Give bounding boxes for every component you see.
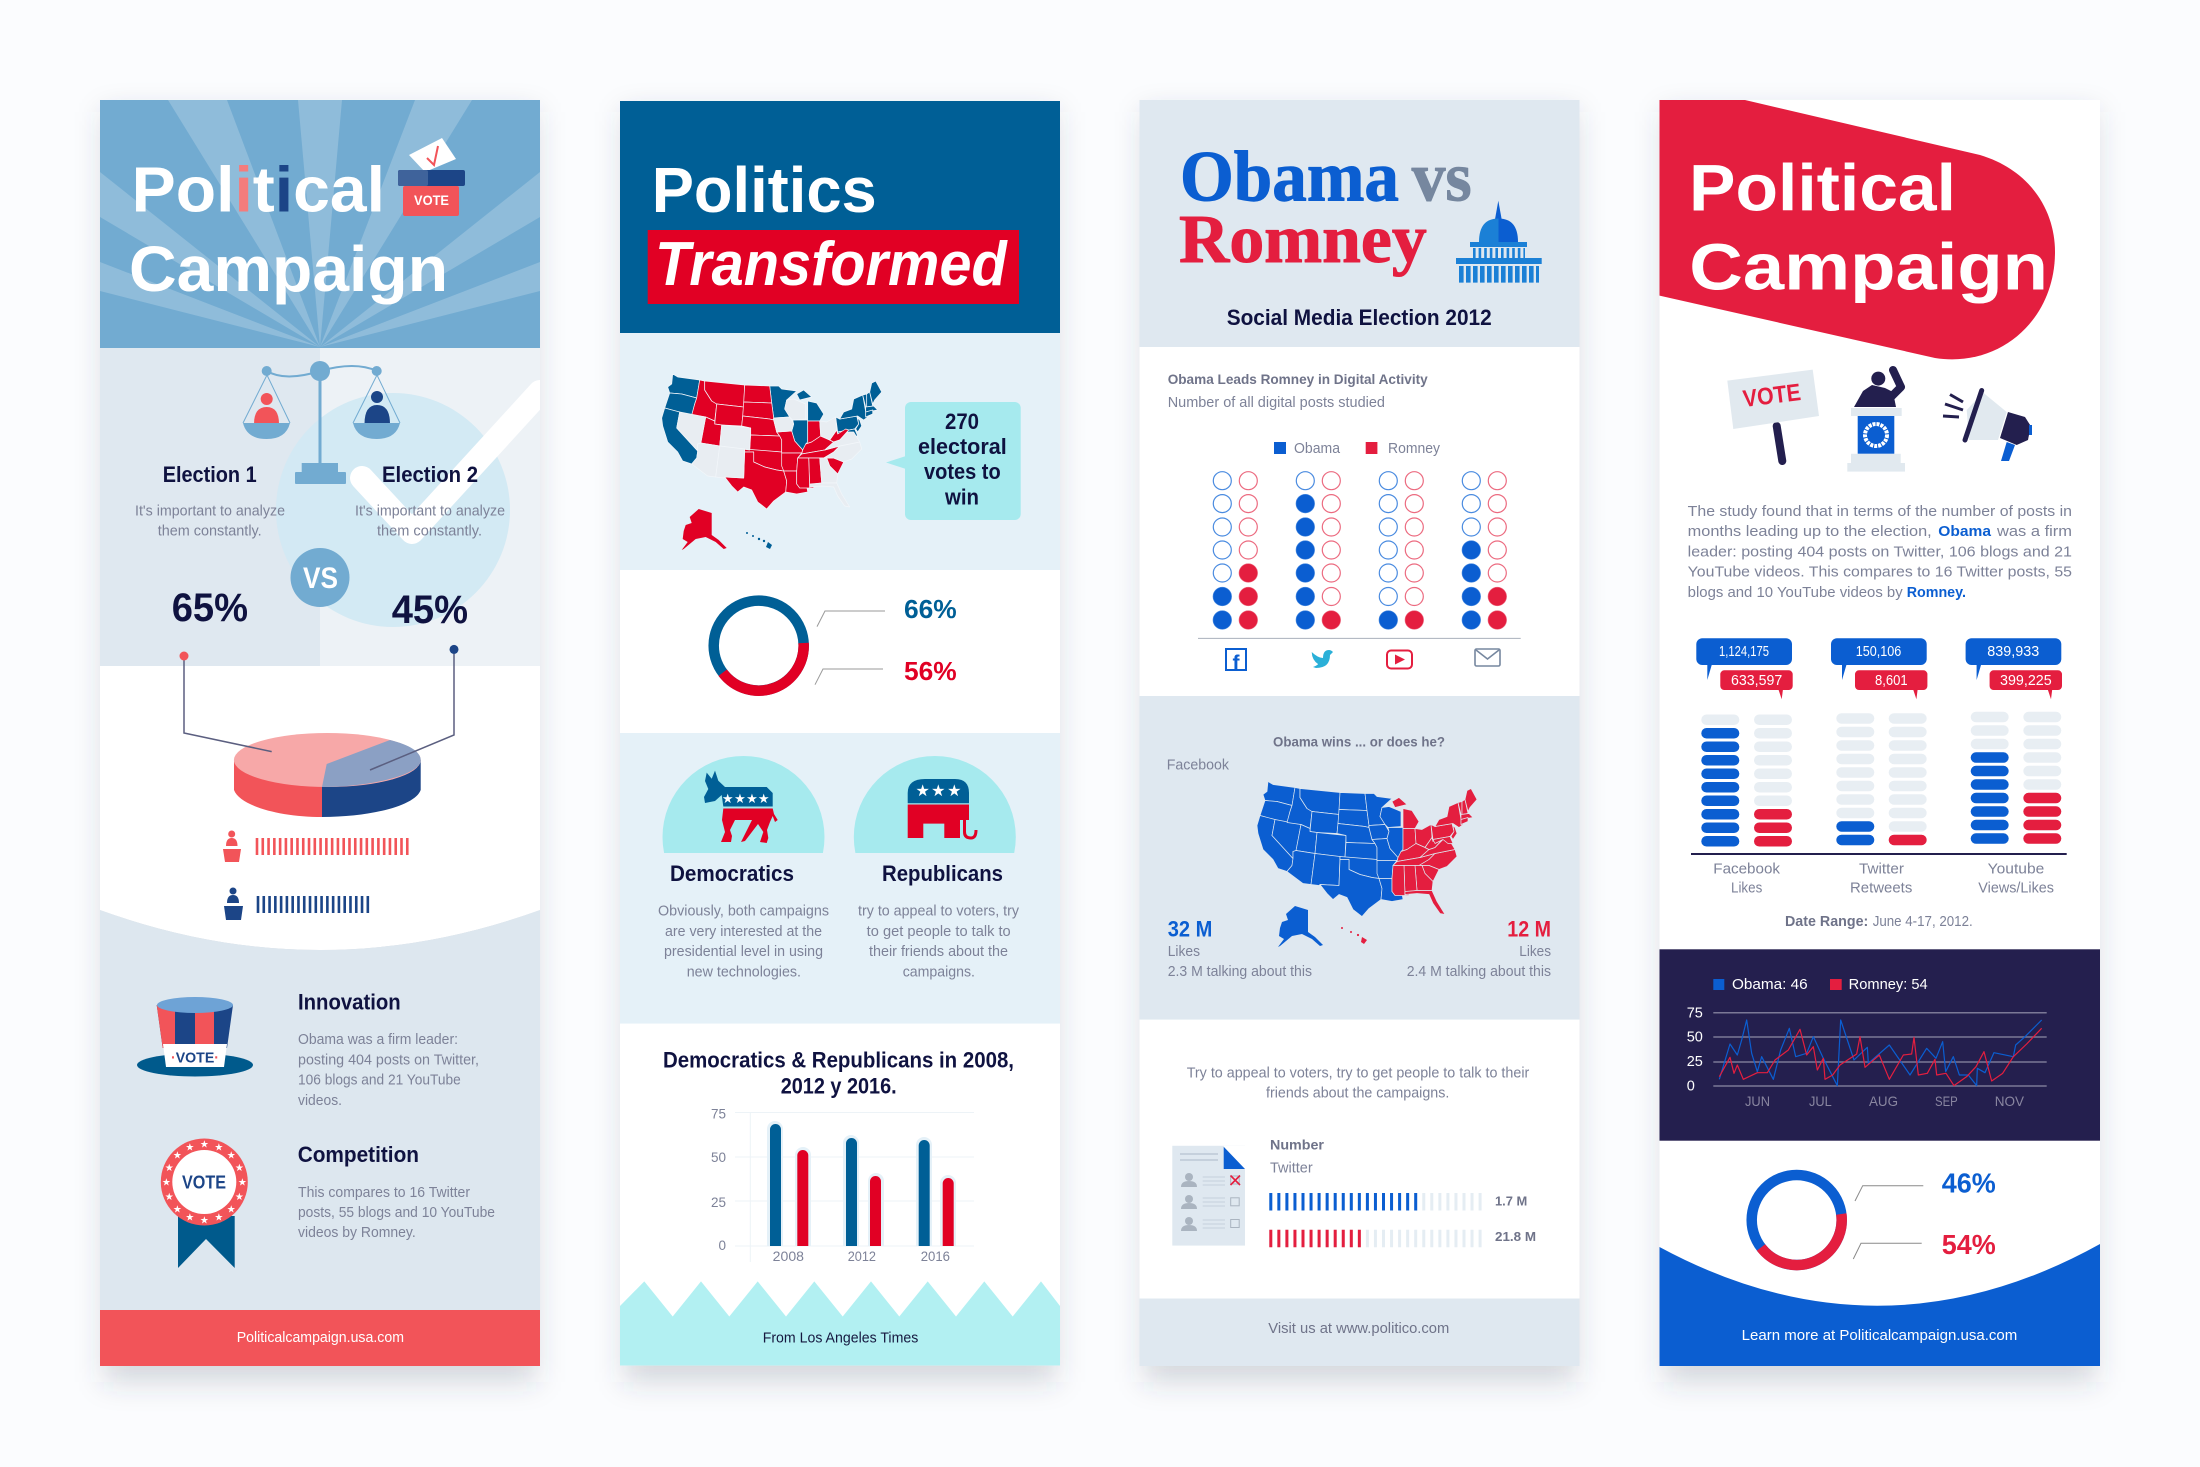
- title: [129, 153, 448, 305]
- obama likes stat: 2.3 M talking about this: [1168, 964, 1312, 980]
- callout: 270 electoral votes: 270: [945, 409, 979, 434]
- callout: 270 electoral votes: votes to: [924, 459, 1001, 484]
- party section background: [620, 733, 1060, 1024]
- twitter number bars: [1269, 1137, 1536, 1244]
- appeal text: [1187, 1065, 1529, 1102]
- icon: twitter: [1312, 650, 1333, 668]
- value 56: 56%: [904, 656, 957, 686]
- white middle section: [100, 666, 540, 950]
- icon: youtube: [1387, 650, 1412, 668]
- twitter number bars: 1.7 M: [1495, 1194, 1527, 1209]
- icon: vote rosette: VOTE: [182, 1173, 226, 1193]
- republicans text: try to appeal to voters, try: [858, 903, 1020, 919]
- chart labels: Views/Likes: [1978, 880, 2054, 897]
- digital activity heading: Obama Leads Romney in Digital Activity: [1168, 371, 1428, 387]
- bar chart: 2008: [773, 1249, 804, 1264]
- innovation text: posting 404 posts on Twitter,: [298, 1052, 479, 1068]
- election 1 text: Election 1: [163, 462, 257, 487]
- democratics text: are very interested at the: [665, 924, 822, 940]
- paragraph: blogs and 10 YouTube videos by: [1688, 585, 1903, 601]
- zigzag footer: From Los Angeles Times: [763, 1330, 918, 1347]
- republicans text: Republicans: [882, 861, 1003, 886]
- twitter number bars: Twitter: [1270, 1161, 1313, 1177]
- icon: donkey: [704, 771, 778, 843]
- callout: 270 electoral votes: [886, 402, 1021, 520]
- icon: megaphone: [1943, 390, 2032, 461]
- obama likes stat: 32 M: [1168, 916, 1212, 941]
- chart labels: Youtube: [1988, 860, 2044, 877]
- speech bubbles youtube: 399,225: [2000, 673, 2052, 689]
- twitter number bars: Number: [1270, 1137, 1325, 1153]
- icon: red podium with bars: [223, 830, 411, 862]
- bar chart: 0: [718, 1238, 726, 1253]
- panel: obama vs romney: [1140, 100, 1580, 1366]
- gridlines and axis labels: JUN: [1745, 1093, 1770, 1109]
- gridlines and axis labels: [1687, 1005, 2047, 1109]
- footer: Visit us at www.politico.com: [1268, 1321, 1449, 1337]
- icon: vote rosette: ★★★★★★★★★★★★★★★★: [162, 1140, 247, 1226]
- digital activity heading: [1168, 371, 1428, 411]
- map section background: [620, 333, 1060, 570]
- republicans text: [858, 861, 1020, 981]
- legend: Romney: [1388, 441, 1441, 457]
- democratics text: [658, 861, 829, 981]
- title: Political: [132, 153, 385, 225]
- republicans text: their friends about the: [869, 944, 1008, 960]
- innovation text: videos.: [298, 1093, 342, 1109]
- header: [620, 101, 1060, 333]
- icon: ballot box: [398, 138, 465, 216]
- gridlines and axis labels: 25: [1687, 1054, 1703, 1070]
- legend: Obama: [1294, 441, 1341, 457]
- legend: [1274, 441, 1441, 457]
- election 1 text: [135, 462, 285, 540]
- election 2 text: It's important to analyze: [355, 503, 505, 519]
- header: Transformed: [655, 230, 1008, 299]
- election 1 text: them constantly.: [158, 524, 262, 540]
- chart legend: Romney: 54: [1849, 977, 1928, 993]
- republicans text: to get people to talk to: [867, 924, 1011, 940]
- map heading: Obama wins ... or does he?: [1273, 733, 1445, 749]
- percent 65: 65%: [172, 586, 248, 630]
- digital activity heading: Number of all digital posts studied: [1168, 395, 1385, 411]
- blue footer wave: Learn more at Politicalcampaign.usa.com: [1742, 1327, 2017, 1344]
- election 2 text: [355, 462, 505, 540]
- title: [1689, 151, 2048, 304]
- panel: politics transformed: [620, 101, 1060, 1366]
- hawaii: [746, 532, 772, 549]
- lower background: [100, 910, 540, 1310]
- white base: [1660, 100, 2100, 1366]
- icon: facebook: [1226, 649, 1246, 675]
- paragraph: leader: posting 404 posts on Twitter, 106 blogs and 21: [1688, 545, 2072, 561]
- alaska: [682, 509, 727, 550]
- vs badge: VS: [303, 562, 338, 595]
- democratics text: Obviously, both campaigns: [658, 903, 829, 919]
- romney likes stat: Likes: [1519, 944, 1551, 960]
- competition text: videos by Romney.: [298, 1225, 416, 1241]
- footer: Politicalcampaign.usa.com: [237, 1330, 404, 1346]
- header background: [1140, 100, 1580, 347]
- white base: [1140, 100, 1580, 1366]
- paragraph: was a firm: [1996, 524, 2072, 540]
- democratics text: presidential level in using: [664, 944, 823, 960]
- romney likes stat: [1407, 916, 1551, 980]
- map section background: [1140, 696, 1580, 1020]
- democratics text: new technologies.: [687, 965, 801, 981]
- vs badge: [290, 548, 350, 607]
- stacked pill chart: [1691, 712, 2067, 854]
- gridlines and axis labels: JUL: [1809, 1093, 1832, 1109]
- bar chart: [711, 1107, 974, 1264]
- date range: Date Range:: [1785, 914, 1868, 930]
- paragraph: Obama: [1938, 524, 1992, 540]
- subtitle: Social Media Election 2012: [1227, 305, 1492, 330]
- gridlines and axis labels: 50: [1687, 1030, 1703, 1046]
- zigzag footer: [620, 1281, 1060, 1366]
- chart section background: [620, 1024, 1060, 1366]
- date range: June 4-17, 2012.: [1873, 914, 1973, 930]
- hawaii: [1341, 927, 1367, 944]
- percent 45: 45%: [392, 588, 468, 632]
- innovation text: Innovation: [298, 990, 401, 1015]
- bar chart: 2016: [921, 1249, 950, 1264]
- chart labels: Facebook: [1713, 860, 1781, 877]
- chart heading: [663, 1048, 1014, 1098]
- icon: vote rosette: [161, 1138, 248, 1268]
- chart legend: Obama: 46: [1732, 977, 1808, 993]
- icon: facebook: f: [1232, 652, 1240, 675]
- icon: elephant: ★★★: [916, 781, 961, 800]
- icon: ballot box: VOTE: [414, 192, 449, 208]
- panel: political campaign red: [1660, 100, 2100, 1366]
- innovation text: 106 blogs and 21 YouTube: [298, 1073, 461, 1089]
- chart legend: [1713, 977, 1928, 993]
- icon: speaker at podium: [1847, 370, 1905, 472]
- speech bubbles facebook: 633,597: [1731, 673, 1782, 689]
- value 66: 66%: [904, 594, 957, 624]
- speech bubbles youtube: [1966, 638, 2062, 699]
- competition text: posts, 55 blogs and 10 YouTube: [298, 1205, 495, 1221]
- romney likes stat: 2.4 M talking about this: [1407, 964, 1551, 980]
- election 1 text: It's important to analyze: [135, 503, 285, 519]
- donut section background: [620, 570, 1060, 733]
- competition text: [298, 1142, 495, 1241]
- chart labels: [1713, 860, 2054, 897]
- chart labels: Retweets: [1850, 880, 1912, 897]
- callout: 270 electoral votes: win: [944, 485, 979, 510]
- title: Obama: [1180, 137, 1399, 217]
- chart labels: Twitter: [1859, 860, 1904, 877]
- icon: uncle sam hat: [137, 997, 253, 1076]
- red header shape: [1660, 100, 2055, 359]
- icon: balance scale: [243, 361, 400, 484]
- obama likes stat: [1168, 916, 1312, 980]
- innovation text: [298, 990, 479, 1109]
- icon: vote sign: [1727, 370, 1819, 461]
- speech bubbles twitter: 8,601: [1875, 673, 1908, 689]
- icon: uncle sam hat: ·VOTE·: [171, 1049, 219, 1066]
- footer: [1140, 1298, 1580, 1366]
- title: Campaign: [129, 233, 448, 305]
- blue footer wave: [1660, 1244, 2100, 1366]
- appeal text: Try to appeal to voters, try to get people to talk to their: [1187, 1065, 1529, 1081]
- election 2 text: Election 2: [382, 462, 478, 487]
- gridlines and axis labels: AUG: [1869, 1093, 1898, 1109]
- dome right: [854, 756, 1016, 853]
- bar chart: 50: [711, 1150, 726, 1165]
- bar chart: 2012: [848, 1249, 876, 1264]
- speech bubbles twitter: 150,106: [1856, 644, 1901, 660]
- donut chart: [1752, 1175, 1923, 1265]
- bar chart: 75: [711, 1107, 726, 1122]
- dome left: [662, 756, 824, 853]
- election 2 text: them constantly.: [377, 524, 482, 540]
- value 54: 54%: [1942, 1229, 1996, 1260]
- header background with rays: [100, 100, 540, 348]
- donut chart: [714, 601, 885, 691]
- bar chart: 25: [711, 1195, 726, 1210]
- title: Political: [1689, 151, 1956, 225]
- paragraph: YouTube videos. This compares to 16 Twitter posts, 55: [1688, 565, 2072, 581]
- us map blue red: [1257, 782, 1477, 916]
- paragraph: [1688, 504, 2072, 601]
- footer: [100, 1310, 540, 1366]
- alaska: [1278, 906, 1323, 947]
- romney likes stat: 12 M: [1507, 916, 1551, 941]
- icon: capitol: [1456, 201, 1542, 274]
- title: Romney: [1179, 201, 1427, 277]
- us map red blue gray: [662, 374, 882, 509]
- icon: navy podium with bars: [224, 888, 372, 920]
- speech bubbles twitter: [1831, 638, 1927, 699]
- comparison background: [100, 348, 540, 666]
- competition text: Competition: [298, 1142, 419, 1167]
- twitter number bars: 21.8 M: [1495, 1229, 1536, 1244]
- panel shadows: [104, 112, 2096, 1382]
- chart heading: 2012 y 2016.: [781, 1073, 897, 1098]
- dot chart: [1198, 472, 1521, 638]
- gridlines and axis labels: SEP: [1935, 1093, 1958, 1109]
- title: vs: [1412, 140, 1472, 217]
- icon: ballot document: [1172, 1146, 1245, 1246]
- title: Campaign: [1689, 230, 2048, 304]
- democratics text: Democratics: [670, 861, 794, 886]
- pie chart 3d: [180, 645, 458, 817]
- line series: [1719, 1020, 2042, 1086]
- appeal text: friends about the campaigns.: [1266, 1086, 1449, 1102]
- republicans text: campaigns.: [903, 965, 975, 981]
- header: Politics: [652, 154, 877, 226]
- competition text: This compares to 16 Twitter: [298, 1185, 470, 1201]
- facebook label: Facebook: [1167, 757, 1230, 773]
- gridlines and axis labels: NOV: [1995, 1093, 2025, 1109]
- icon: mail: [1475, 649, 1500, 666]
- innovation text: Obama was a firm leader:: [298, 1032, 458, 1048]
- date range: [1785, 914, 1973, 930]
- line chart panel: [1660, 949, 2100, 1141]
- speech bubbles facebook: 1,124,175: [1719, 644, 1769, 660]
- paragraph: months leading up to the election,: [1688, 524, 1932, 540]
- chart heading: Democratics & Republicans in 2008,: [663, 1048, 1014, 1073]
- gridlines and axis labels: 0: [1687, 1079, 1695, 1095]
- panel: political campaign light blue: [100, 100, 540, 1366]
- paragraph: Romney.: [1907, 585, 1966, 601]
- gridlines and axis labels: 75: [1687, 1005, 1703, 1021]
- speech bubbles youtube: 839,933: [1987, 644, 2039, 660]
- title: [1179, 137, 1472, 277]
- paragraph: The study found that in terms of the number of posts in: [1688, 504, 2072, 520]
- value 46: 46%: [1942, 1167, 1996, 1198]
- icon: vote sign: VOTE: [1741, 379, 1802, 413]
- obama likes stat: Likes: [1168, 944, 1200, 960]
- chart labels: Likes: [1731, 880, 1762, 897]
- icon: donkey: ★★★★: [722, 792, 770, 807]
- speech bubbles facebook: [1696, 638, 1793, 699]
- callout: 270 electoral votes: electoral: [918, 434, 1007, 459]
- icon: elephant: [908, 779, 976, 838]
